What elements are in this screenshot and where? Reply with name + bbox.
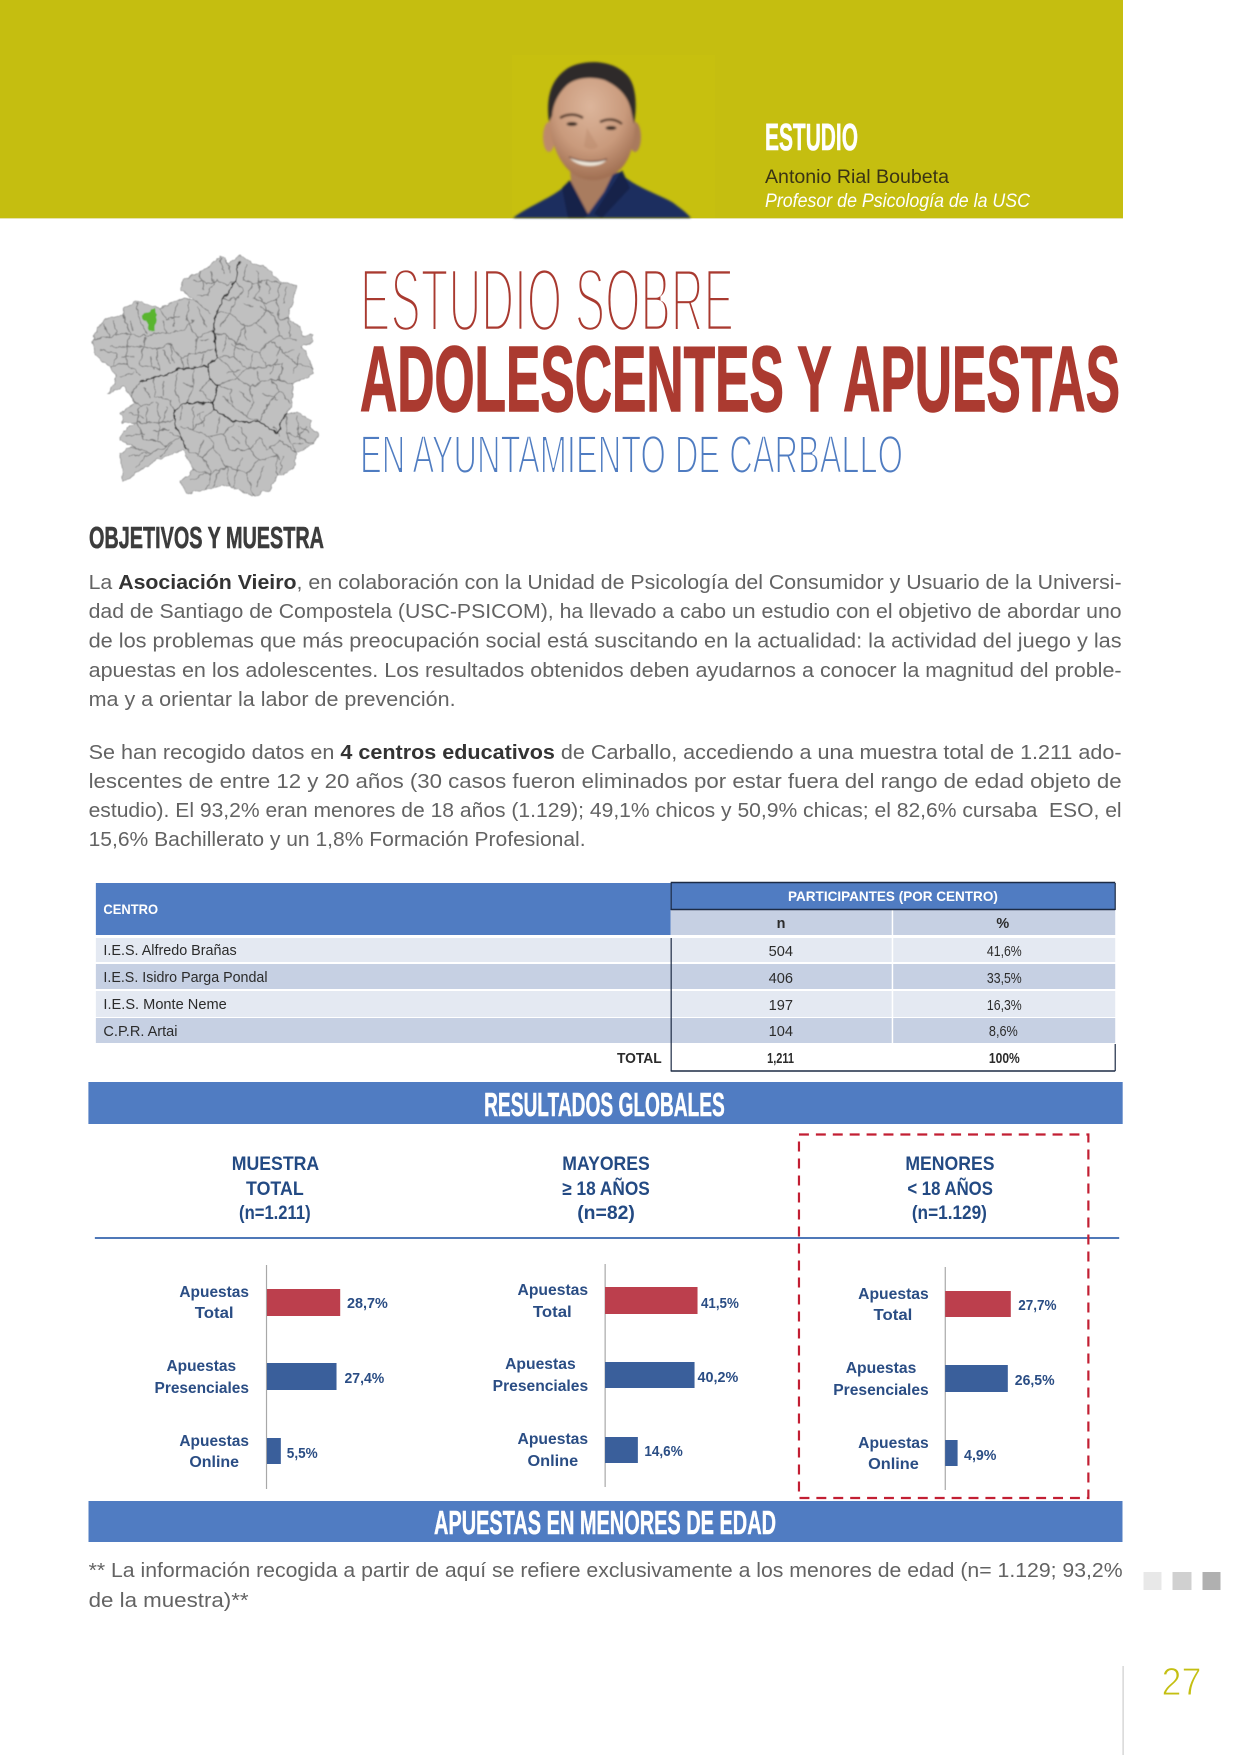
chart: menores: 4,9% <box>964 1447 996 1464</box>
chart: menores: Online <box>868 1456 919 1473</box>
table rows: I.E.S. Alfredo Brañas <box>103 943 237 959</box>
table rows: I.E.S. Isidro Parga Pondal <box>103 970 268 986</box>
chart: muestra total: Presenciales <box>155 1380 249 1397</box>
title line 1: ESTUDIO SOBRE <box>360 251 734 351</box>
banner: resultados globales: RESULTADOS GLOBALES <box>484 1086 725 1123</box>
chart: mayores: Total <box>533 1304 572 1321</box>
header: muestra total: TOTAL <box>246 1179 304 1200</box>
title <box>360 251 1120 485</box>
paragraph 2: lescentes de entre 12 y 20 años (30 casos fueron eliminados por estar fuera del rango de edad objeto de <box>89 771 1122 793</box>
chart: muestra total: Online <box>189 1454 239 1471</box>
chart: muestra total: Apuestas <box>166 1358 236 1375</box>
paragraph 1: dad de Santiago de Compostela (USC-PSICOM), ha llevado a cabo un estudio con el objetivo de abordar uno <box>89 601 1122 623</box>
table: participantes por centro <box>96 882 1115 1071</box>
chart: muestra total: Total <box>195 1305 234 1322</box>
table rows: C.P.R. Artai <box>103 1024 178 1040</box>
page number <box>1122 1661 1202 1755</box>
header: muestra total <box>232 1154 320 1224</box>
paragraph 1: apuestas en los adolescentes. Los resultados obtenidos deben ayudarnos a conocer la magnitud del proble- <box>89 660 1122 682</box>
header: menores: (n=1.129) <box>912 1203 987 1224</box>
chart: menores <box>833 1267 1057 1490</box>
table header: % <box>996 916 1009 932</box>
chart: mayores: Apuestas <box>518 1431 588 1448</box>
group headers and divider <box>95 1154 1119 1239</box>
table rows: 504 <box>769 944 793 960</box>
chart: menores: Total <box>874 1307 912 1324</box>
paragraph 1: La Asociación Vieiro , en colaboración con la Unidad de Psicología del Consumidor y Usuario de la Universi- <box>89 572 1122 594</box>
footnote: de la muestra)** <box>89 1590 249 1612</box>
page marker squares <box>1144 1572 1220 1590</box>
table rows: 197 <box>769 998 793 1014</box>
table rows: 16,3% <box>987 998 1022 1014</box>
chart: mayores: 14,6% <box>644 1443 683 1460</box>
chart: mayores <box>493 1264 739 1487</box>
paragraph 1: ma y a orientar la labor de prevención. <box>89 689 456 711</box>
banner: apuestas en menores de edad <box>88 1501 1122 1542</box>
chart: mayores: Apuestas <box>505 1356 576 1373</box>
banner: resultados globales <box>88 1082 1123 1124</box>
header: mayores: ≥ 18 AÑOS <box>562 1178 650 1200</box>
chart: menores: Presenciales <box>833 1382 929 1399</box>
table total row <box>617 1051 1020 1067</box>
label: estudio: ESTUDIO <box>765 117 858 159</box>
header: menores: MENORES <box>905 1154 994 1175</box>
author name: Antonio Rial Boubeta <box>765 167 949 188</box>
chart: muestra total <box>155 1265 388 1489</box>
paragraph 1: de los problemas que más preocupación social está suscitando en la actualidad: la actividad del juego y las <box>89 630 1122 652</box>
chart: mayores: 41,5% <box>701 1295 739 1312</box>
chart: menores: 27,7% <box>1018 1297 1057 1314</box>
paragraph 1 <box>89 572 1122 711</box>
table header <box>103 888 1009 932</box>
banner: apuestas en menores de edad: APUESTAS EN MENORES DE EDAD <box>434 1504 776 1541</box>
header: mayores: (n=82) <box>577 1203 635 1224</box>
chart: menores: Apuestas <box>858 1286 929 1303</box>
paragraph 2: estudio). El 93,2% eran menores de 18 años (1.129); 49,1% chicos y 50,9% chicas; el 82,6% cursaba ESO, el <box>89 800 1122 822</box>
table rows: 406 <box>769 971 793 987</box>
dashed highlight around menores <box>799 1134 1088 1498</box>
table header: CENTRO <box>103 901 158 917</box>
chart: menores: 26,5% <box>1015 1372 1055 1389</box>
chart: mayores: Presenciales <box>493 1378 588 1395</box>
header: muestra total: MUESTRA <box>232 1154 320 1175</box>
footnote: ** La información recogida a partir de aquí se refiere exclusivamente a los menores de edad (n= 1.129; 93,2% <box>89 1560 1123 1582</box>
header: menores: < 18 AÑOS <box>907 1178 993 1200</box>
chart: mayores: 40,2% <box>698 1369 738 1386</box>
table total row: 100% <box>989 1051 1020 1067</box>
footnote <box>89 1560 1123 1612</box>
table header: PARTICIPANTES (POR CENTRO) <box>788 888 998 904</box>
table header: n <box>777 916 785 932</box>
chart: muestra total: 28,7% <box>347 1295 388 1312</box>
paragraph 2: Se han recogido datos en 4 centros educativos de Carballo, accediendo a una muestra total de 1.211 ado- <box>89 742 1122 764</box>
table rows: I.E.S. Monte Neme <box>103 997 227 1013</box>
table rows <box>103 943 1022 1040</box>
paragraph 2 <box>89 742 1122 851</box>
table rows: 41,6% <box>987 944 1022 960</box>
header: muestra total: (n=1.211) <box>239 1203 311 1224</box>
table total row: TOTAL <box>617 1051 662 1067</box>
author role: Profesor de Psicología de la USC <box>765 191 1030 212</box>
header: mayores <box>562 1154 650 1224</box>
chart: muestra total: Apuestas <box>179 1284 249 1301</box>
chart: muestra total: Apuestas <box>179 1433 249 1450</box>
paragraph 2: 15,6% Bachillerato y un 1,8% Formación Profesional. <box>89 829 586 851</box>
chart: menores: Apuestas <box>858 1435 929 1452</box>
table rows: 104 <box>769 1024 793 1040</box>
table total row: 1,211 <box>767 1051 794 1067</box>
chart: muestra total: 27,4% <box>344 1370 384 1387</box>
header: menores <box>905 1154 994 1224</box>
map of Galicia with Carballo highlighted <box>93 255 318 497</box>
section heading: objetivos y muestra: OBJETIVOS Y MUESTRA <box>89 520 324 555</box>
results area: table, global results and charts <box>88 882 1123 1498</box>
portrait photo <box>513 62 691 218</box>
page number: 27 <box>1162 1661 1202 1704</box>
table rows: 33,5% <box>987 971 1022 987</box>
chart: muestra total: 5,5% <box>287 1445 318 1462</box>
title line 3: EN AYUNTAMIENTO DE CARBALLO <box>360 425 903 485</box>
table rows: 8,6% <box>989 1024 1018 1040</box>
header banner <box>0 0 1123 219</box>
chart: menores: Apuestas <box>846 1360 916 1377</box>
header: mayores: MAYORES <box>562 1154 650 1175</box>
chart: mayores: Apuestas <box>518 1282 588 1299</box>
chart: mayores: Online <box>527 1453 578 1470</box>
